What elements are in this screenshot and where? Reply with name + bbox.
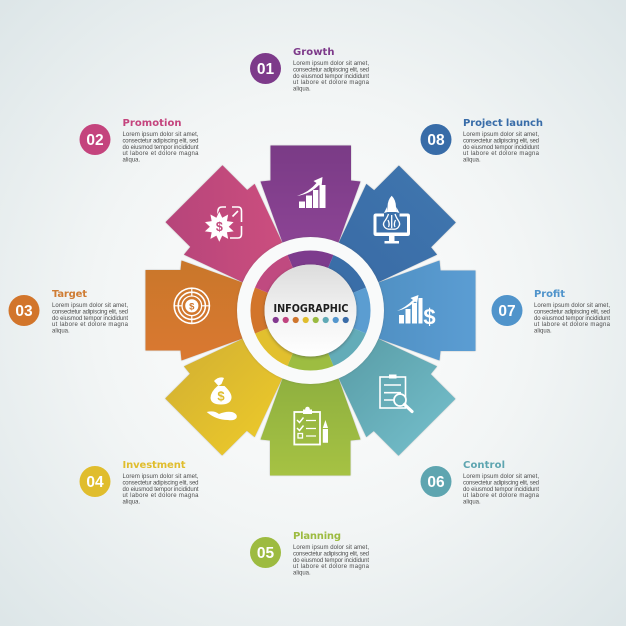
heading and text: Profit <box>534 289 565 300</box>
heading and text: ut labore et dolore magna <box>463 493 540 499</box>
center hub <box>237 237 384 384</box>
heading and text: ut labore et dolore magna <box>122 493 199 499</box>
heading and text: Promotion <box>122 118 182 129</box>
badge 06: 06 <box>427 474 445 491</box>
heading and text: ut labore et dolore magna <box>122 151 199 157</box>
heading and text: Target <box>52 289 87 300</box>
block 08 project launch <box>420 118 543 164</box>
heading and text: do eiusmod tempor incididunt <box>52 316 128 322</box>
hub title: INFOGRAPHIC <box>274 303 349 315</box>
heading and text: Lorem ipsum dolor sit amet, <box>52 303 128 309</box>
colour ring <box>257 257 364 364</box>
heading and text: Planning <box>293 531 341 542</box>
heading and text: consectetur adipiscing elit, sed <box>122 138 198 144</box>
heading and text: Growth <box>293 47 334 58</box>
heading and text: Lorem ipsum dolor sit amet, <box>463 474 539 480</box>
icon: checklist and pencil <box>294 407 328 444</box>
segment: project launch <box>314 158 463 307</box>
heading and text: consectetur adipiscing elit, sed <box>293 551 369 557</box>
block 07 profit <box>492 289 611 335</box>
heading and text <box>293 47 370 93</box>
segment: target <box>146 260 255 360</box>
icon: dollar target: $ <box>189 301 195 312</box>
heading and text: aliqua. <box>293 571 311 577</box>
heading and text: aliqua. <box>463 158 481 164</box>
heading and text: do eiusmod tempor incididunt <box>463 487 539 493</box>
segment: investment <box>158 314 307 463</box>
badge 03: 03 <box>15 303 33 320</box>
heading and text: do eiusmod tempor incididunt <box>122 487 199 493</box>
heading and text: Control <box>463 460 505 471</box>
block 01 growth <box>250 47 370 93</box>
icon: dollar target <box>174 288 210 324</box>
icon: growth chart <box>297 177 326 208</box>
icon: profit chart: $ <box>423 304 436 330</box>
segment: growth <box>260 146 360 255</box>
segment: promotion <box>158 158 307 307</box>
badge 01: 01 <box>257 61 274 78</box>
heading and text: consectetur adipiscing elit, sed <box>463 480 539 486</box>
heading and text: ut labore et dolore magna <box>534 322 611 328</box>
heading and text: Lorem ipsum dolor sit amet, <box>122 132 199 138</box>
heading and text: consectetur adipiscing elit, sed <box>293 67 369 73</box>
icon: document with magnifier <box>380 374 412 412</box>
heading and text <box>293 531 370 577</box>
segment: control <box>314 314 463 463</box>
block 05 planning <box>250 531 370 577</box>
heading and text: aliqua. <box>122 158 141 164</box>
heading and text: ut labore et dolore magna <box>293 564 370 570</box>
heading and text: do eiusmod tempor incididunt <box>293 558 369 564</box>
heading and text: do eiusmod tempor incididunt <box>122 145 199 151</box>
heading and text: aliqua. <box>463 500 481 506</box>
rocket exhaust cloud <box>383 214 400 229</box>
heading and text: aliqua. <box>52 329 70 335</box>
block 04 investment <box>80 460 199 506</box>
heading and text: Lorem ipsum dolor sit amet, <box>463 132 539 138</box>
heading and text: ut labore et dolore magna <box>293 80 370 86</box>
badge 07: 07 <box>498 303 516 320</box>
segment: profit <box>366 260 476 360</box>
heading and text <box>463 460 540 506</box>
hub dots <box>273 317 349 323</box>
block 03 target <box>8 289 129 335</box>
heading and text: consectetur adipiscing elit, sed <box>52 309 128 315</box>
heading and text: aliqua. <box>122 500 141 506</box>
icon: money bag and hand: $ <box>217 388 225 404</box>
heading and text: do eiusmod tempor incididunt <box>534 316 610 322</box>
heading and text: Investment <box>122 460 186 471</box>
heading and text: Lorem ipsum dolor sit amet, <box>534 303 610 309</box>
icon: money bag and hand <box>207 377 237 420</box>
segment: planning <box>260 366 360 476</box>
icon: starburst target: $ <box>216 220 223 234</box>
heading and text: consectetur adipiscing elit, sed <box>463 138 539 144</box>
icon: rocket launch monitor <box>374 196 410 244</box>
heading and text: Project launch <box>463 118 543 129</box>
heading and text <box>52 289 129 335</box>
heading and text: do eiusmod tempor incididunt <box>463 145 539 151</box>
heading and text: consectetur adipiscing elit, sed <box>122 480 198 486</box>
heading and text: consectetur adipiscing elit, sed <box>534 309 610 315</box>
block 06 control <box>420 460 540 506</box>
icon: starburst target <box>204 207 242 243</box>
heading and text: aliqua. <box>293 87 311 93</box>
heading and text: do eiusmod tempor incididunt <box>293 74 369 80</box>
heading and text: ut labore et dolore magna <box>52 322 129 328</box>
heading and text <box>122 118 199 164</box>
badge 05: 05 <box>257 545 274 562</box>
icon: profit chart <box>397 295 436 330</box>
badge 04: 04 <box>86 474 104 491</box>
heading and text: Lorem ipsum dolor sit amet, <box>293 545 369 551</box>
badge 08: 08 <box>427 132 445 149</box>
heading and text: aliqua. <box>534 329 552 335</box>
heading and text: Lorem ipsum dolor sit amet, <box>293 61 369 67</box>
block 02 promotion <box>80 118 199 164</box>
heading and text: Lorem ipsum dolor sit amet, <box>122 474 199 480</box>
heading and text <box>534 289 611 335</box>
heading and text: ut labore et dolore magna <box>463 151 540 157</box>
heading and text <box>463 118 543 164</box>
badge 02: 02 <box>86 132 104 149</box>
heading and text <box>122 460 199 506</box>
